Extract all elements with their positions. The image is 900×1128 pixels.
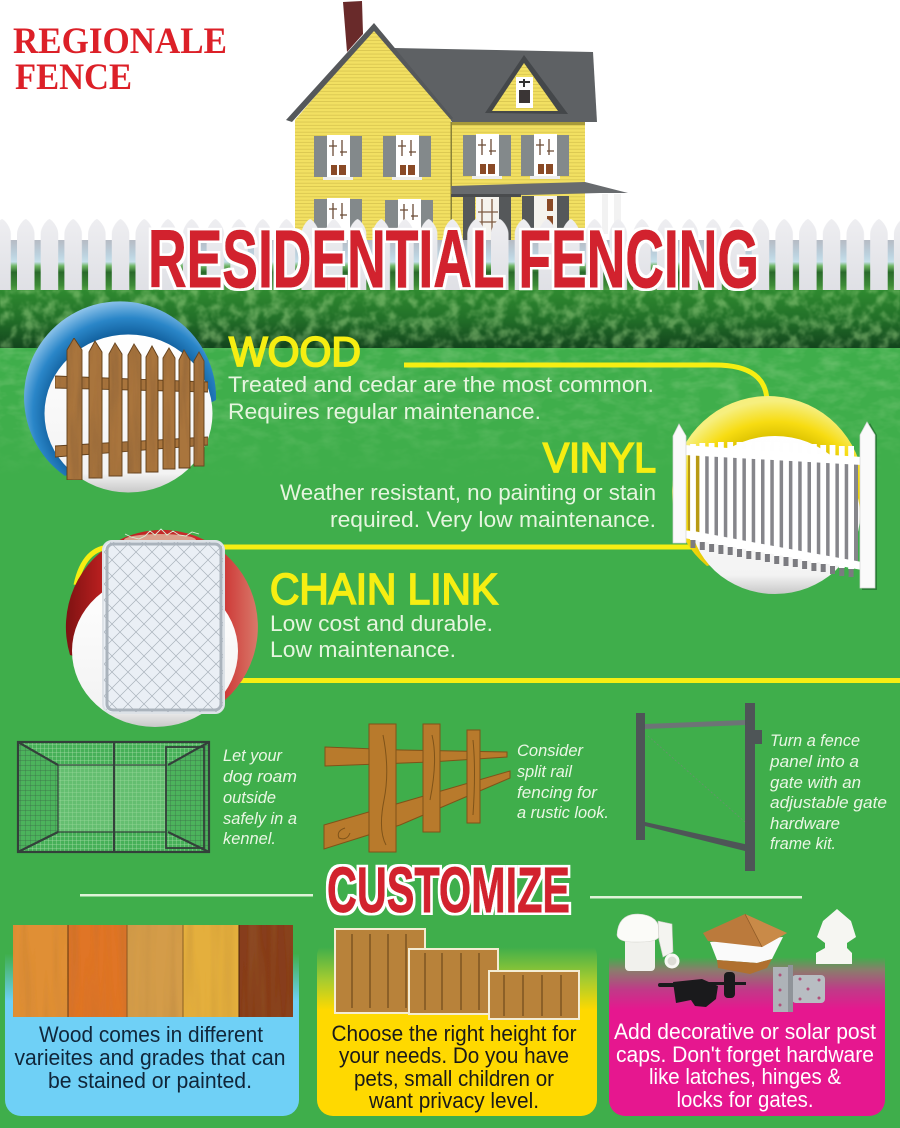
illustration: kennel <box>17 741 210 853</box>
panel: wood <box>24 301 654 492</box>
logo: Regionale Fence <box>13 21 227 98</box>
panel: chain link <box>66 529 498 727</box>
text: kennel caption: outside <box>223 788 276 807</box>
text: wood description: Treated and cedar are the most common. <box>228 372 654 397</box>
panel: fence height <box>317 929 597 1116</box>
illustration: gate frame <box>636 703 762 871</box>
text: post caps and hardware: like latches, hinges & <box>649 1064 841 1089</box>
icon: white finial <box>816 909 856 964</box>
heading: wood: WOOD <box>229 328 361 375</box>
text: post caps and hardware <box>614 1019 876 1112</box>
icon: white post cap <box>617 914 678 971</box>
text: wood description: Requires regular maintenance. <box>228 399 541 424</box>
panel background <box>5 925 299 1116</box>
panel: vinyl <box>280 396 877 594</box>
connector: chain link to edge <box>226 678 900 683</box>
picket fence <box>0 219 900 292</box>
text: split rail caption: fencing for <box>517 783 598 802</box>
logo: Regionale Fence: REGIONALE <box>13 21 227 62</box>
icon: wood fence badge <box>24 301 216 492</box>
panel: post caps and hardware <box>609 909 885 1116</box>
text: split rail caption: split rail <box>517 762 573 781</box>
text: gate caption <box>769 731 887 853</box>
text: fence height: pets, small children or <box>354 1066 554 1091</box>
text: fence height <box>332 1021 576 1113</box>
heading: chain link: CHAIN LINK <box>270 565 498 614</box>
illustration: yellow house <box>286 1 628 244</box>
panel: wood finishes <box>5 925 299 1116</box>
text: gate caption: Turn a fence <box>770 731 860 750</box>
heading: vinyl: VINYL <box>543 434 656 481</box>
text: vinyl description: required. Very low maintenance. <box>330 507 656 532</box>
text: gate caption: gate with an <box>770 773 861 792</box>
text: wood finishes: Wood comes in different <box>39 1022 263 1047</box>
text: post caps and hardware: locks for gates. <box>676 1087 814 1112</box>
text: post caps and hardware: caps. Don't forget hardware <box>616 1042 874 1067</box>
text: gate caption: frame kit. <box>770 834 836 853</box>
text: gate caption: hardware <box>770 814 840 833</box>
text: wood finishes: be stained or painted. <box>48 1068 252 1093</box>
icon: copper solar cap <box>703 914 787 974</box>
panel background <box>317 940 597 1116</box>
heading: customize: CUSTOMIZE <box>327 854 570 926</box>
text: wood description <box>228 372 654 424</box>
logo: Regionale Fence: FENCE <box>15 57 132 98</box>
panel background <box>609 930 885 1116</box>
text: chain link description <box>270 611 493 662</box>
text: gate caption: adjustable gate <box>770 793 887 812</box>
hedge <box>0 290 900 348</box>
text: split rail caption <box>517 741 609 822</box>
text: kennel caption: safely in a <box>223 809 297 828</box>
item: gate hardware kit <box>636 703 887 871</box>
illustration: split rail <box>324 724 510 852</box>
text: fence height: your needs. Do you have <box>339 1043 569 1068</box>
item: split rail fence <box>324 724 609 852</box>
lawn background <box>0 345 900 1128</box>
text: wood finishes <box>14 1022 286 1093</box>
icon: vinyl fence badge <box>672 396 877 594</box>
text: post caps and hardware: Add decorative or solar post <box>614 1019 876 1044</box>
fence height boards <box>335 929 579 1019</box>
text: chain link description: Low maintenance. <box>270 637 456 662</box>
text: kennel caption: Let your <box>223 746 283 765</box>
text: kennel caption: dog roam <box>223 767 297 786</box>
text: fence height: Choose the right height for <box>332 1021 576 1046</box>
text: fence height: want privacy level. <box>368 1088 539 1113</box>
text: chain link description: Low cost and durable. <box>270 611 493 636</box>
connector: wood to vinyl <box>404 365 767 404</box>
text: vinyl description <box>280 480 656 532</box>
item: dog kennel <box>17 741 297 853</box>
text: gate caption: panel into a <box>769 752 859 771</box>
wood stain swatches <box>13 925 293 1017</box>
text: kennel caption <box>223 746 297 848</box>
icon: metal hinge <box>773 965 825 1012</box>
text: split rail caption: a rustic look. <box>517 803 609 822</box>
icon: black latch <box>658 972 746 1007</box>
text: kennel caption: kennel. <box>223 829 276 848</box>
icon: chain link badge <box>66 529 258 727</box>
connector: vinyl to chain link <box>76 547 695 585</box>
text: vinyl description: Weather resistant, no painting or stain <box>280 480 656 505</box>
text: split rail caption: Consider <box>517 741 584 760</box>
text: wood finishes: varieites and grades that can <box>14 1045 286 1070</box>
